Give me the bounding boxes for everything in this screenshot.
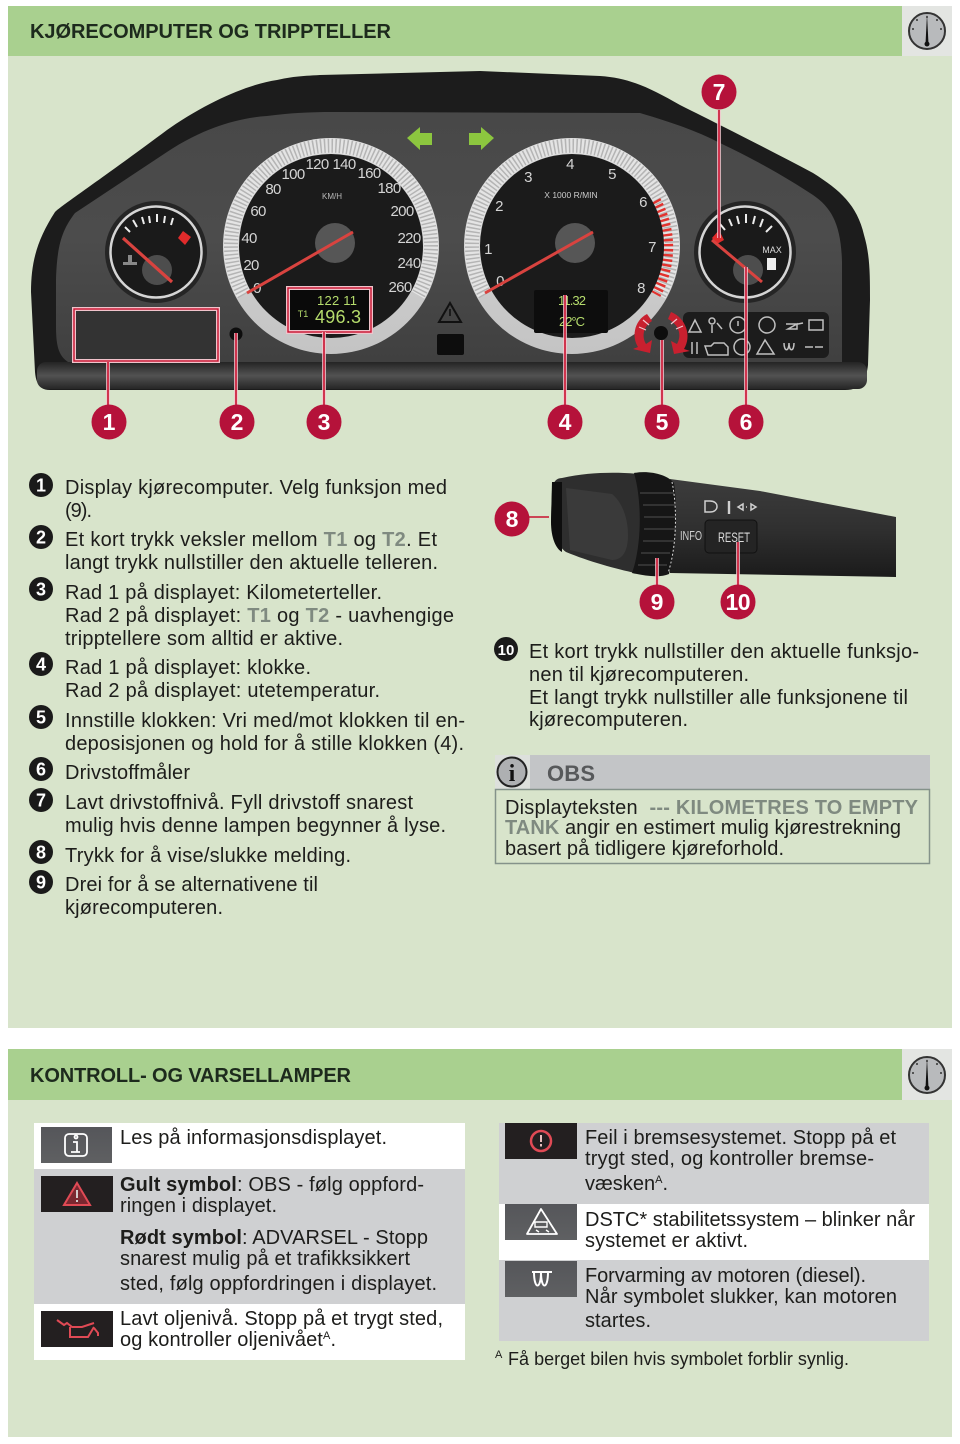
header bar: trip computer — [8, 6, 952, 56]
item 7: 7 — [36, 790, 46, 810]
callout 9: 9 — [651, 589, 663, 615]
tachometer: 5 — [608, 166, 616, 183]
item 10 text: Et kort trykk nullstiller den aktuelle funksjo- — [529, 641, 919, 663]
table: left lamps — [34, 1123, 465, 1360]
callout 5: 5 — [656, 409, 669, 435]
panel: warning lamps section background — [8, 1049, 952, 1437]
heading: KONTROLL- OG VARSELLAMPER: KONTROLL- OG VARSELLAMPER — [30, 1065, 352, 1087]
item 7: Lavt drivstoffnivå. Fyll drivstoff snarest — [65, 792, 413, 814]
speedometer: 100 — [282, 166, 305, 183]
speedometer: 180 — [378, 180, 401, 197]
reset button — [230, 328, 242, 340]
row: general warning symbol — [34, 1169, 465, 1304]
dashboard lower strip — [37, 362, 867, 389]
item 10 text: 10 — [498, 642, 514, 659]
turn signal arrows — [407, 127, 494, 150]
item 3: 3 — [36, 580, 46, 600]
callout 1 — [92, 404, 126, 440]
tachometer: 1 — [484, 241, 492, 258]
tachometer: X 1000 R/MIN — [544, 190, 598, 200]
speedometer: 260 — [389, 279, 412, 296]
item 1: Display kjørecomputer. Velg funksjon med — [65, 477, 447, 499]
right fuel gauge — [694, 201, 796, 303]
icon: gauge — [909, 13, 945, 49]
row: DSTC stability system: DSTC* stabilitetssystem – blinker når — [585, 1209, 915, 1231]
callout 4 — [548, 404, 582, 440]
speedometer: KM/H — [322, 192, 342, 201]
item 4: Rad 2 på displayet: utetemperatur. — [65, 680, 380, 702]
row: diesel preheating: Når symbolet slukker, kan motoren — [585, 1286, 897, 1308]
dashboard instrument cluster — [31, 71, 870, 390]
callout 9 — [640, 558, 674, 620]
speedometer: 60 — [250, 203, 266, 220]
note text: basert på tidligere kjøreforhold. — [505, 838, 784, 860]
row: brake system fault — [499, 1123, 929, 1204]
callout 7: 7 — [713, 79, 725, 105]
item 8: Trykk for å vise/slukke melding. — [65, 845, 351, 867]
icon: information — [498, 758, 526, 787]
row: low oil level: . — [330, 1329, 336, 1351]
callout 3 — [306, 404, 342, 440]
row: general warning symbol: snarest mulig på et trafikksikkert — [120, 1248, 410, 1270]
rotation arrows on knob — [633, 312, 690, 354]
item 6: 6 — [36, 760, 46, 780]
row: brake system fault: A — [655, 1174, 663, 1186]
odometer display — [288, 288, 371, 332]
item 6 — [29, 757, 190, 784]
speedometer: 40 — [241, 230, 257, 247]
row: general warning symbol: sted, følg oppfordringen i displayet. — [120, 1273, 437, 1295]
footnote: Få berget bilen hvis symbolet forblir synlig. — [508, 1349, 849, 1369]
row: low oil level: og kontroller oljenivået — [120, 1329, 323, 1351]
clock and temperature display: 11.32 — [558, 293, 586, 308]
row: diesel preheating: Forvarming av motoren (diesel). — [585, 1265, 866, 1287]
heading: KJØRECOMPUTER OG TRIPPTELLER: KJØRECOMPUTER OG TRIPPTELLER — [30, 21, 392, 43]
stalk tip — [551, 473, 640, 574]
row: diesel preheating: startes. — [585, 1310, 651, 1332]
row: information display: Les på informasjonsdisplayet. — [120, 1127, 387, 1149]
dashboard inner face — [56, 112, 842, 362]
item 3: Rad 1 på displayet: Kilometerteller. — [65, 582, 382, 604]
tachometer: 2 — [495, 198, 503, 215]
left temperature gauge — [105, 201, 207, 303]
row: general warning symbol: ringen i displayet. — [120, 1195, 277, 1217]
item 5: deposisjonen og hold for å stille klokken (4). — [65, 733, 464, 755]
callout 10 — [720, 542, 756, 620]
note text: TANK angir en estimert mulig kjørestrekning — [505, 817, 901, 839]
item 5: Innstille klokken: Vri med/mot klokken til en- — [65, 710, 465, 732]
row: low oil level: Lavt oljenivå. Stopp på et trygt sted, — [120, 1308, 443, 1330]
row: brake system fault: . — [662, 1173, 668, 1195]
tachometer: 7 — [648, 239, 656, 256]
row: DSTC stability system: systemet er aktivt. — [585, 1230, 748, 1252]
right fuel gauge: MAX — [762, 245, 782, 255]
callout 6: 6 — [740, 409, 752, 435]
item 9 — [29, 870, 318, 919]
dashboard outer shell — [31, 71, 870, 390]
item 3 — [29, 577, 454, 650]
note box: OBS — [495, 755, 930, 864]
item 7: mulig hvis denne lampen begynner å lyse. — [65, 815, 446, 837]
callout 5 — [644, 404, 680, 440]
callout 8: 8 — [506, 506, 519, 532]
item 10 text — [494, 637, 919, 731]
item 2: 2 — [36, 528, 46, 548]
icon: gauge — [909, 1057, 945, 1093]
tachometer — [464, 138, 680, 354]
item 9: kjørecomputeren. — [65, 897, 223, 919]
RESET button — [705, 520, 757, 553]
row: low oil level — [34, 1304, 465, 1360]
row: low oil level: A — [323, 1330, 331, 1342]
item 4 — [29, 652, 380, 702]
stalk illustration — [494, 472, 896, 620]
clock and temperature display — [534, 290, 608, 333]
warning lamp strip — [683, 312, 829, 358]
note text: Displayteksten --- KILOMETRES TO EMPTY — [505, 797, 919, 819]
item 2 — [29, 525, 438, 574]
item 7 — [29, 788, 446, 837]
header bar: warning lamps — [8, 1049, 952, 1100]
callout 2 — [220, 404, 254, 440]
row: general warning symbol: Gult symbol: OBS - følg oppford- — [120, 1174, 424, 1196]
callout 10: 10 — [726, 589, 750, 615]
RESET button: RESET — [718, 529, 750, 545]
callout 7 — [702, 74, 736, 110]
speedometer: 200 — [391, 203, 414, 220]
panel: top section background — [8, 6, 952, 1028]
speedometer: 240 — [398, 255, 421, 272]
lamp symbols — [705, 501, 756, 514]
panel: trip computer display location — [74, 309, 218, 361]
stalk shaft — [670, 479, 896, 577]
tachometer: 4 — [566, 156, 574, 173]
INFO label: INFO — [680, 528, 702, 543]
item 3: tripptellere som alltid er aktive. — [65, 628, 343, 650]
speedometer: 0 — [253, 280, 261, 297]
footnote: A — [495, 1349, 503, 1361]
item 9: Drei for å se alternativene til — [65, 874, 318, 896]
row: brake system fault: trygt sted, og kontroller bremse- — [585, 1148, 874, 1170]
warning triangle and button — [437, 303, 464, 355]
item 1 — [29, 473, 447, 522]
odometer display: 496.3 — [315, 307, 361, 327]
item 6: Drivstoffmåler — [65, 762, 190, 784]
callout 6 — [728, 404, 764, 440]
heading: OBS: OBS — [547, 761, 595, 786]
item 3: Rad 2 på displayet: T1 og T2 - uavhengige — [65, 605, 454, 627]
odometer display: T1 — [298, 309, 308, 319]
speedometer — [223, 138, 439, 354]
callout 1: 1 — [103, 409, 116, 435]
item 2: Et kort trykk veksler mellom T1 og T2. Et — [65, 529, 437, 551]
item 9: 9 — [36, 872, 46, 892]
row: information display — [34, 1123, 465, 1169]
note text — [496, 790, 930, 864]
clock and temperature display: 22°C — [559, 314, 585, 329]
item 2: langt trykk nullstiller den aktuelle telleren. — [65, 552, 438, 574]
item 5: 5 — [36, 708, 46, 728]
icon: information: i — [509, 761, 516, 787]
speedometer: 20 — [243, 257, 259, 274]
item 10 text: nen til kjørecomputeren. — [529, 664, 749, 686]
odometer display: 122 11 — [317, 293, 357, 308]
speedometer: 120 — [306, 156, 329, 173]
tachometer: 8 — [637, 280, 645, 297]
tachometer: 3 — [524, 169, 532, 186]
callout 2: 2 — [231, 409, 243, 435]
row: general warning symbol: Rødt symbol: ADVARSEL - Stopp — [120, 1227, 428, 1249]
item 1: 1 — [36, 476, 46, 496]
row: brake system fault: Feil i bremsesystemet. Stopp på et — [585, 1127, 896, 1149]
item 4: Rad 1 på displayet: klokke. — [65, 657, 311, 679]
speedometer: 160 — [358, 165, 381, 182]
callout 3: 3 — [318, 409, 330, 435]
speedometer: 80 — [265, 181, 281, 198]
tachometer: 0 — [496, 273, 504, 290]
tachometer: 6 — [639, 194, 647, 211]
item 4: 4 — [36, 654, 46, 674]
item 1: (9). — [65, 500, 92, 522]
item 10 text: kjørecomputeren. — [529, 709, 688, 731]
item 10 text: Et langt trykk nullstiller alle funksjonene til — [529, 687, 908, 709]
table: right lamps — [499, 1123, 929, 1341]
row: diesel preheating — [499, 1260, 929, 1341]
callout 8 — [494, 502, 549, 536]
scroll wheel — [632, 472, 676, 576]
text list: numbered items 1 to 9 — [29, 473, 465, 919]
callouts on dashboard — [92, 74, 764, 440]
callout 4: 4 — [559, 409, 572, 435]
item 8: 8 — [36, 842, 46, 862]
item 5 — [29, 705, 465, 755]
row: DSTC stability system — [499, 1204, 929, 1260]
speedometer: 220 — [398, 230, 421, 247]
row: brake system fault: væsken — [585, 1173, 655, 1195]
speedometer: 140 — [333, 156, 356, 173]
